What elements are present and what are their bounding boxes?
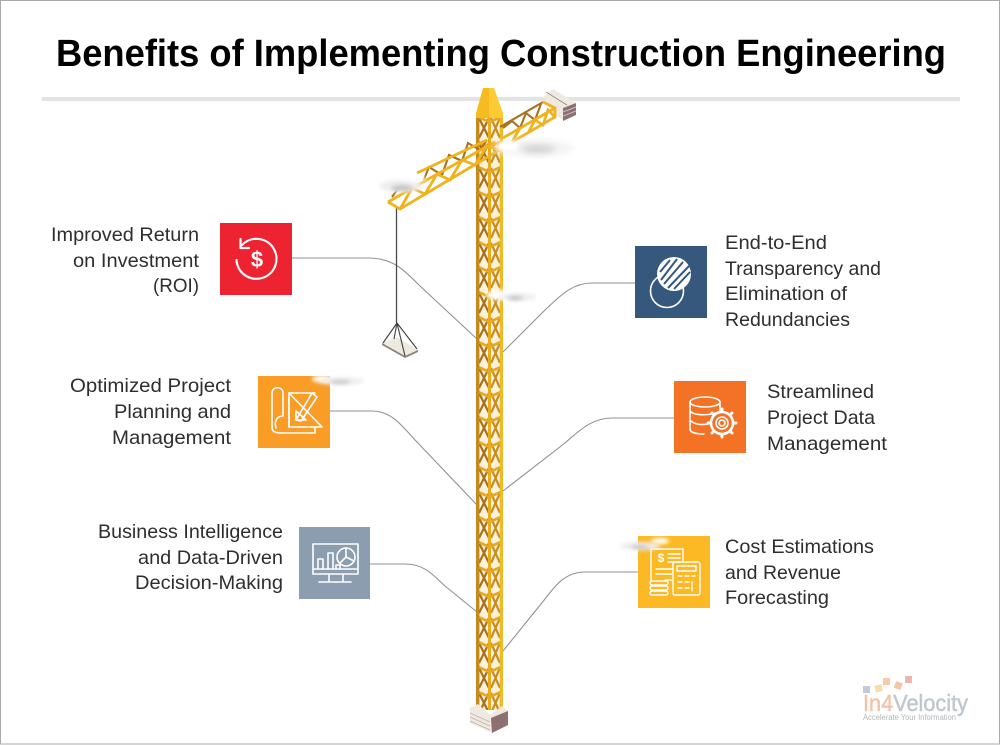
crane base xyxy=(470,704,508,733)
icon tile: slate xyxy=(299,527,370,599)
panel: business intelligence xyxy=(98,521,370,599)
icon: return dollar xyxy=(236,239,276,279)
crane top cap xyxy=(476,88,503,118)
icon tile: orange red xyxy=(674,381,746,453)
label: planning xyxy=(70,375,232,449)
label: business intelligence xyxy=(98,521,283,594)
label: transparency: Redundancies xyxy=(725,309,850,331)
connector lines xyxy=(292,258,674,651)
icon tile: orange xyxy=(258,376,330,448)
crane xyxy=(382,88,576,733)
label: data management: Streamlined xyxy=(767,381,874,403)
label: cost estimations: and Revenue xyxy=(725,562,841,584)
panel: transparency xyxy=(635,232,881,331)
crane boom front truss xyxy=(388,102,555,209)
panel: cost estimations xyxy=(620,536,874,609)
label: business intelligence: and Data-Driven xyxy=(138,547,283,569)
label: planning: Planning and xyxy=(114,401,231,423)
label: transparency: End-to-End xyxy=(725,232,827,254)
label: cost estimations: Cost Estimations xyxy=(725,536,874,558)
icon: overlapping circles xyxy=(650,257,691,308)
panel: planning xyxy=(70,375,364,449)
icon: blueprint and set square xyxy=(272,388,322,433)
panel: data management xyxy=(674,381,888,455)
label: improved ROI xyxy=(51,224,200,297)
panel: improved ROI xyxy=(51,223,292,297)
crane counterweight xyxy=(543,89,576,121)
label: planning: Optimized Project xyxy=(70,375,232,397)
label: data management: Project Data xyxy=(767,407,875,429)
cloud: tower xyxy=(486,290,536,301)
label: improved ROI: (ROI) xyxy=(153,275,199,297)
cloud: boom right xyxy=(494,140,574,156)
label: business intelligence: Business Intelligence xyxy=(98,521,283,543)
icon tile: red xyxy=(220,223,292,295)
label: transparency xyxy=(725,232,881,331)
crane tower xyxy=(476,114,503,710)
cloud: boom left xyxy=(379,176,426,192)
cloud: cost xyxy=(620,538,669,550)
icon tile: blue xyxy=(635,246,707,318)
logo: In4Velocity xyxy=(863,676,968,722)
logo squares xyxy=(863,676,912,693)
crane boom back truss xyxy=(392,102,543,197)
cloud: planning xyxy=(312,376,364,385)
title: Benefits of Implementing Construction Engineering xyxy=(56,33,946,75)
title rule xyxy=(42,97,960,101)
label: improved ROI: Improved Return xyxy=(51,224,199,246)
label: transparency: Elimination of xyxy=(725,283,848,305)
icon: return dollar: $ xyxy=(251,247,263,272)
label: data management xyxy=(767,381,888,455)
logo tagline: Accelerate Your Information xyxy=(863,713,956,722)
label: transparency: Transparency and xyxy=(725,258,881,280)
label: cost estimations xyxy=(725,536,874,609)
label: improved ROI: on Investment xyxy=(73,250,200,272)
icon: monitor with charts xyxy=(313,544,358,582)
icon: invoice, coins and calculator xyxy=(650,549,700,595)
label: business intelligence: Decision-Making xyxy=(135,572,283,594)
icon: invoice, coins and calculator: $ xyxy=(658,551,665,565)
crane hook cable and load xyxy=(382,206,418,358)
logo wordmark: In4Velocity xyxy=(863,690,968,716)
label: data management: Management xyxy=(767,433,888,455)
icon tile: yellow xyxy=(638,536,710,608)
label: cost estimations: Forecasting xyxy=(725,587,829,609)
icon: database with gear xyxy=(690,397,736,437)
label: planning: Management xyxy=(112,427,232,449)
